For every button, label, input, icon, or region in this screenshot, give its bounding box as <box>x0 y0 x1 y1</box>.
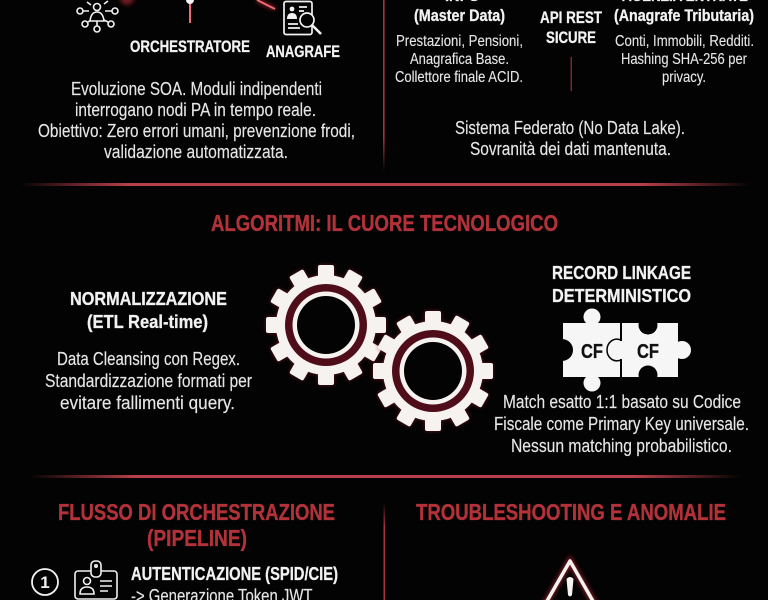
card: INPS: Anagrafica Base. <box>410 51 509 68</box>
label: API REST: SICURE <box>546 28 596 47</box>
block: normalizzazione: Standardizzazione formati per <box>45 371 252 391</box>
block: record linkage title <box>552 263 691 306</box>
icon: puzzle CF: CF <box>581 341 603 363</box>
connector: orchestrator node <box>120 0 275 23</box>
panel: architettura (top left) <box>38 0 355 162</box>
panel: algoritmi <box>45 210 749 456</box>
text: sistema federato: Sistema Federato (No Data Lake). <box>455 118 685 138</box>
block: normalizzazione: Data Cleansing con Regex. <box>57 349 240 369</box>
label: API REST: API REST <box>540 8 602 27</box>
block: normalizzazione: evitare fallimenti query. <box>60 393 235 413</box>
block: normalizzazione: NORMALIZZAZIONE <box>70 289 227 309</box>
icon: orchestration network <box>77 1 118 32</box>
card: INPS: Prestazioni, Pensioni, <box>396 33 523 50</box>
block: record linkage title: RECORD LINKAGE <box>552 263 691 283</box>
step 1 text <box>131 564 338 600</box>
icon: ID badge <box>75 561 117 599</box>
text: match esatto: Nessun matching probabilistico. <box>511 436 732 456</box>
icon: anagrafe document with magnifier <box>284 2 321 34</box>
heading: algoritmi: ALGORITMI: IL CUORE TECNOLOGICO <box>211 210 558 236</box>
heading: flusso <box>58 499 335 551</box>
panel: flusso di orchestrazione <box>32 499 338 600</box>
heading: flusso: FLUSSO DI ORCHESTRAZIONE <box>58 499 335 525</box>
step 1 number: 1 <box>40 573 50 592</box>
block: normalizzazione <box>45 289 252 413</box>
card: INPS: Collettore finale ACID. <box>395 69 523 86</box>
step 1 text: AUTENTICAZIONE (SPID/CIE) <box>131 564 338 584</box>
panel: sistema federato (top right) <box>395 0 754 159</box>
block: normalizzazione: (ETL Real-time) <box>87 312 208 332</box>
text: descrizione SOA: Obiettivo: Zero errori umani, prevenzione frodi, <box>38 121 355 141</box>
text: descrizione SOA: Evoluzione SOA. Moduli indipendenti <box>71 79 322 99</box>
icon: puzzle CF: CF <box>637 341 659 363</box>
text: sistema federato <box>455 118 685 159</box>
step 1 number <box>32 569 58 595</box>
text: descrizione SOA: validazione automatizzata. <box>104 142 288 162</box>
icon: gears <box>266 265 493 431</box>
text: descrizione SOA <box>38 79 355 162</box>
card: Agenzia Entrate: privacy. <box>662 69 706 86</box>
icon: puzzle CF <box>551 308 691 392</box>
card: INPS: (Master Data) <box>414 6 505 25</box>
card: Agenzia Entrate <box>614 0 754 86</box>
text: match esatto <box>494 392 749 456</box>
heading: flusso: (PIPELINE) <box>147 525 247 551</box>
panel: troubleshooting <box>416 499 726 600</box>
text: sistema federato: Sovranità dei dati mantenuta. <box>470 139 671 159</box>
icon: warning triangle <box>535 561 605 600</box>
card: INPS <box>395 0 523 86</box>
label: orchestratore: ORCHESTRATORE <box>130 37 250 56</box>
label: API REST <box>540 8 602 91</box>
divider: top vertical <box>383 0 385 172</box>
label: anagrafe: ANAGRAFE <box>266 42 340 61</box>
text: descrizione SOA: interrogano nodi PA in tempo reale. <box>75 100 316 120</box>
block: record linkage title: DETERMINISTICO <box>552 286 691 306</box>
